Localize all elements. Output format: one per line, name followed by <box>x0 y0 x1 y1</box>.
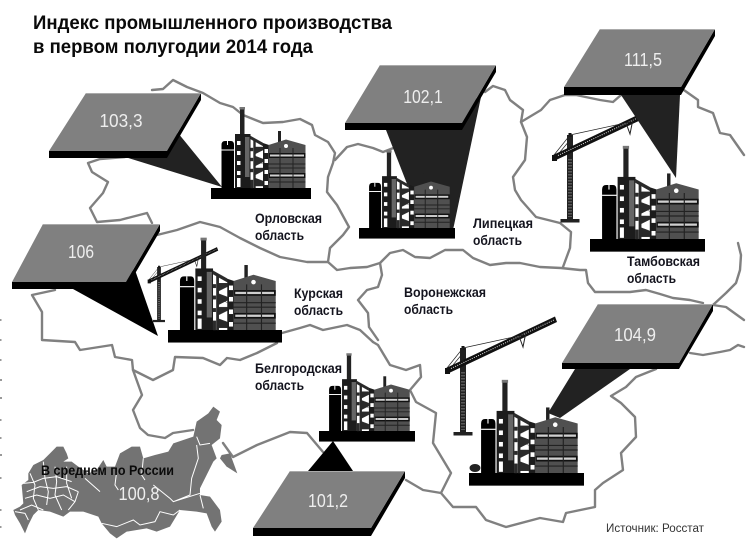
panel: Voronezh region <box>404 284 713 486</box>
region label: область <box>404 301 453 317</box>
callout <box>621 95 680 178</box>
panel: Tambov region <box>552 29 715 286</box>
factory icon <box>590 146 705 252</box>
crane icon <box>445 316 557 436</box>
region label: Белгородская <box>255 360 342 376</box>
callout <box>125 133 222 187</box>
value plate: 106 <box>68 242 94 262</box>
source note: Источник: Росстат <box>606 523 705 535</box>
panel: Lipetsk region <box>345 65 533 248</box>
region label: область <box>294 302 343 318</box>
value plate: 104,9 <box>614 325 656 345</box>
map of Russia with average <box>13 407 237 538</box>
value plate: 102,1 <box>403 87 443 107</box>
region label: Воронежская <box>404 284 486 300</box>
crane icon <box>148 247 218 322</box>
callout <box>308 441 353 471</box>
title: в первом полугодии 2014 года <box>33 36 313 58</box>
value: 100,8: 100,8 <box>118 484 160 504</box>
region label <box>404 284 486 317</box>
crane icon <box>552 104 664 222</box>
factory icon <box>319 353 415 442</box>
panel: Kursk region <box>12 224 343 343</box>
region label: область <box>627 270 676 286</box>
region label: Орловская <box>255 210 322 226</box>
panel: Belgorod region <box>253 353 415 536</box>
value plate: 101,2 <box>308 491 348 511</box>
factory icon <box>469 380 584 486</box>
label: average in Russia: В среднем по России <box>41 462 174 478</box>
callout <box>386 97 481 230</box>
title: Индекс промышленного производства <box>33 12 392 34</box>
value plate: 111,5 <box>624 50 662 70</box>
value plate <box>345 65 496 130</box>
region label: область <box>255 377 304 393</box>
panel: Orel region <box>49 93 322 243</box>
value plate: 103,3 <box>100 111 142 131</box>
region label <box>627 253 700 286</box>
value plate <box>49 93 201 158</box>
value plate <box>253 471 405 536</box>
title <box>33 12 392 58</box>
region label: Тамбовская <box>627 253 700 269</box>
region label <box>473 215 533 248</box>
factory icon <box>168 238 282 343</box>
region label <box>255 360 342 393</box>
region label: Курская <box>294 285 343 301</box>
value plate <box>562 304 713 369</box>
region label: область <box>473 232 522 248</box>
callout <box>548 369 630 418</box>
value plate <box>564 29 715 95</box>
callout <box>73 270 158 336</box>
map borders of regions <box>32 80 744 527</box>
value plate <box>12 224 160 289</box>
factory icon <box>211 107 311 199</box>
factory icon <box>359 150 455 239</box>
region label: область <box>255 227 304 243</box>
region label <box>255 210 322 243</box>
region label <box>294 285 343 318</box>
region label: Липецкая <box>473 215 533 231</box>
